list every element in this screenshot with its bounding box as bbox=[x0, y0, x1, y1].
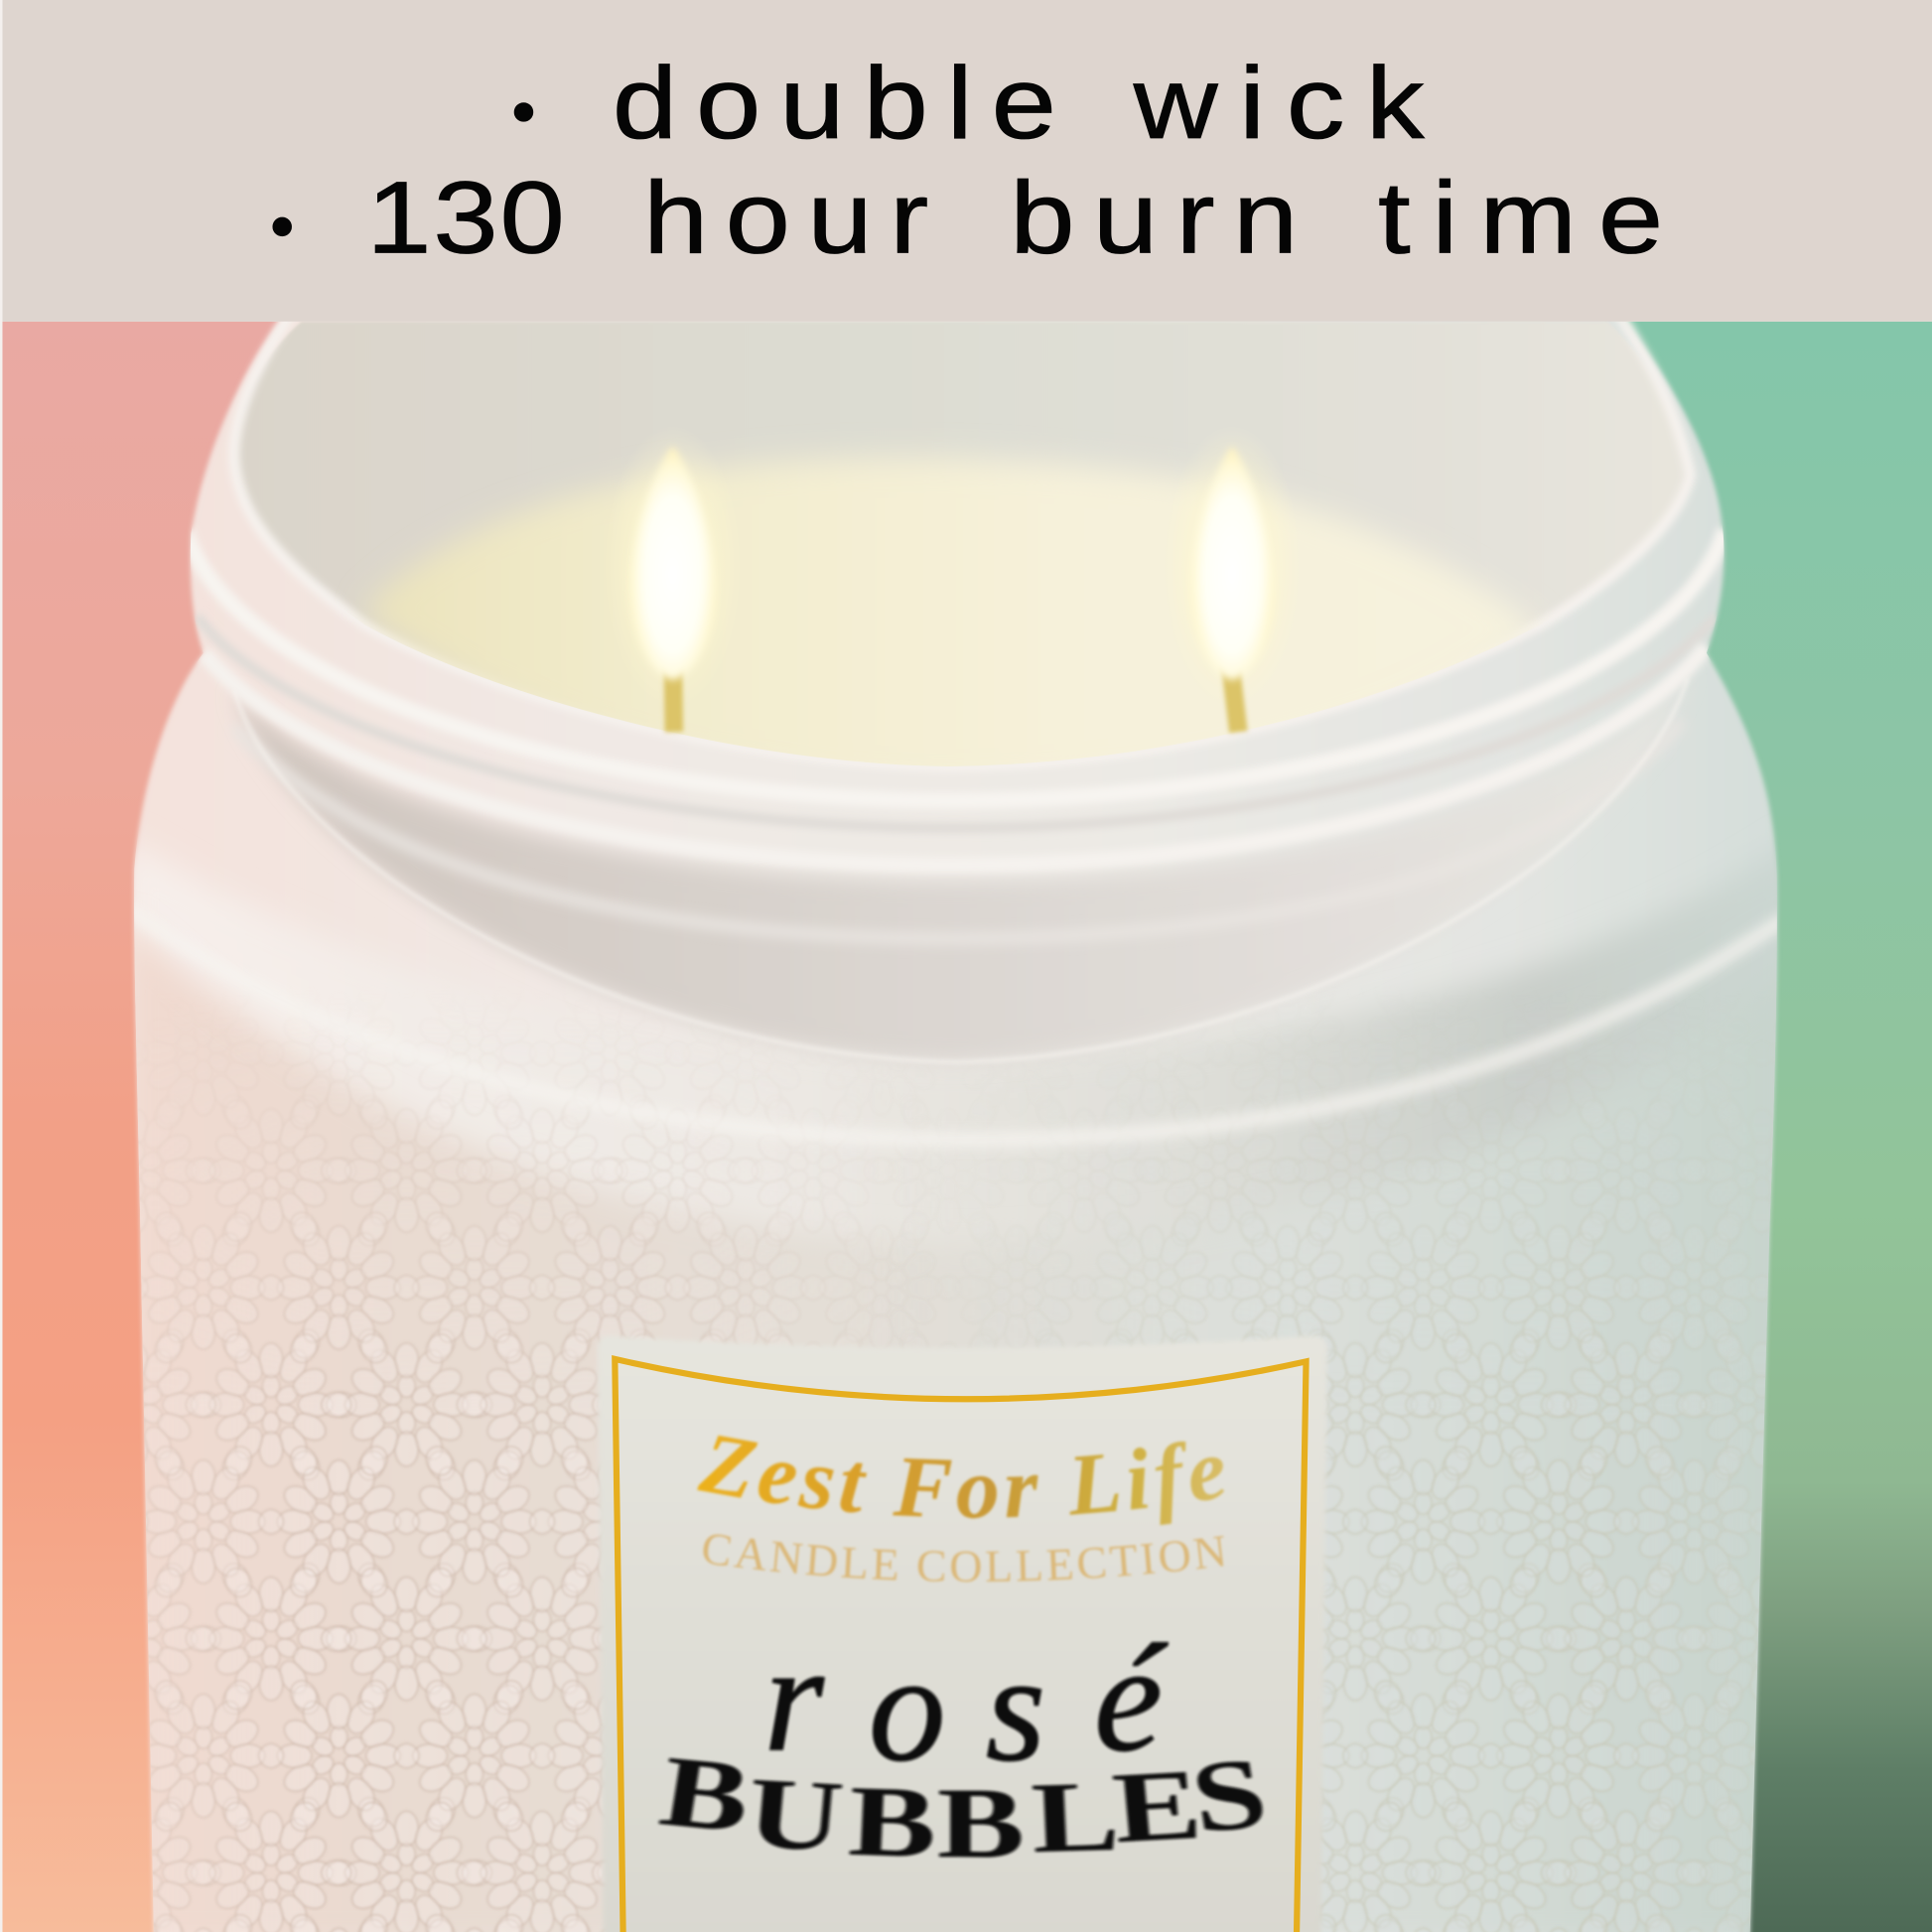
scent name: BUBBLES: BUBBLES bbox=[653, 1734, 1274, 1879]
jar silhouette bbox=[134, 308, 1777, 1932]
product label bbox=[598, 1335, 1327, 1932]
bullet line: 130 hour burn time: burn bbox=[1010, 161, 1298, 275]
jar surface shading and texture bbox=[123, 530, 1799, 1932]
bullet line: 130 hour burn time: hour bbox=[643, 161, 928, 275]
bullet line: 130 hour burn time: 130 bbox=[366, 161, 565, 275]
header band bbox=[0, 0, 1932, 322]
jar interior bbox=[234, 322, 1691, 766]
collection line: CANDLE COLLECTION bbox=[699, 1522, 1232, 1591]
brand name: Zest For Life bbox=[695, 1434, 1225, 1527]
shoulder bbox=[123, 838, 1799, 1355]
bullet line: 130 hour burn time bbox=[273, 161, 1663, 275]
bullet line: double wick: wick bbox=[1133, 47, 1425, 160]
gold border bbox=[615, 1359, 1307, 1932]
neck ridges bbox=[123, 530, 1787, 1140]
rim lip bbox=[234, 296, 1691, 766]
embossed lower body bbox=[123, 918, 1799, 1932]
bullet line: double wick: double bbox=[613, 47, 1056, 160]
bullet line: 130 hour burn time: time bbox=[1378, 161, 1663, 275]
bullet line: double wick bbox=[514, 47, 1425, 160]
right flame bbox=[1164, 425, 1302, 732]
scent name: rosé: rosé bbox=[763, 1612, 1169, 1793]
embossed pattern, warm side bbox=[123, 911, 986, 1932]
wax pool bbox=[363, 458, 1540, 788]
left edge sliver bbox=[0, 0, 2, 1932]
neck shading bbox=[234, 671, 1688, 1062]
left flame bbox=[604, 425, 742, 732]
embossed pattern, cool side bbox=[863, 911, 1799, 1932]
